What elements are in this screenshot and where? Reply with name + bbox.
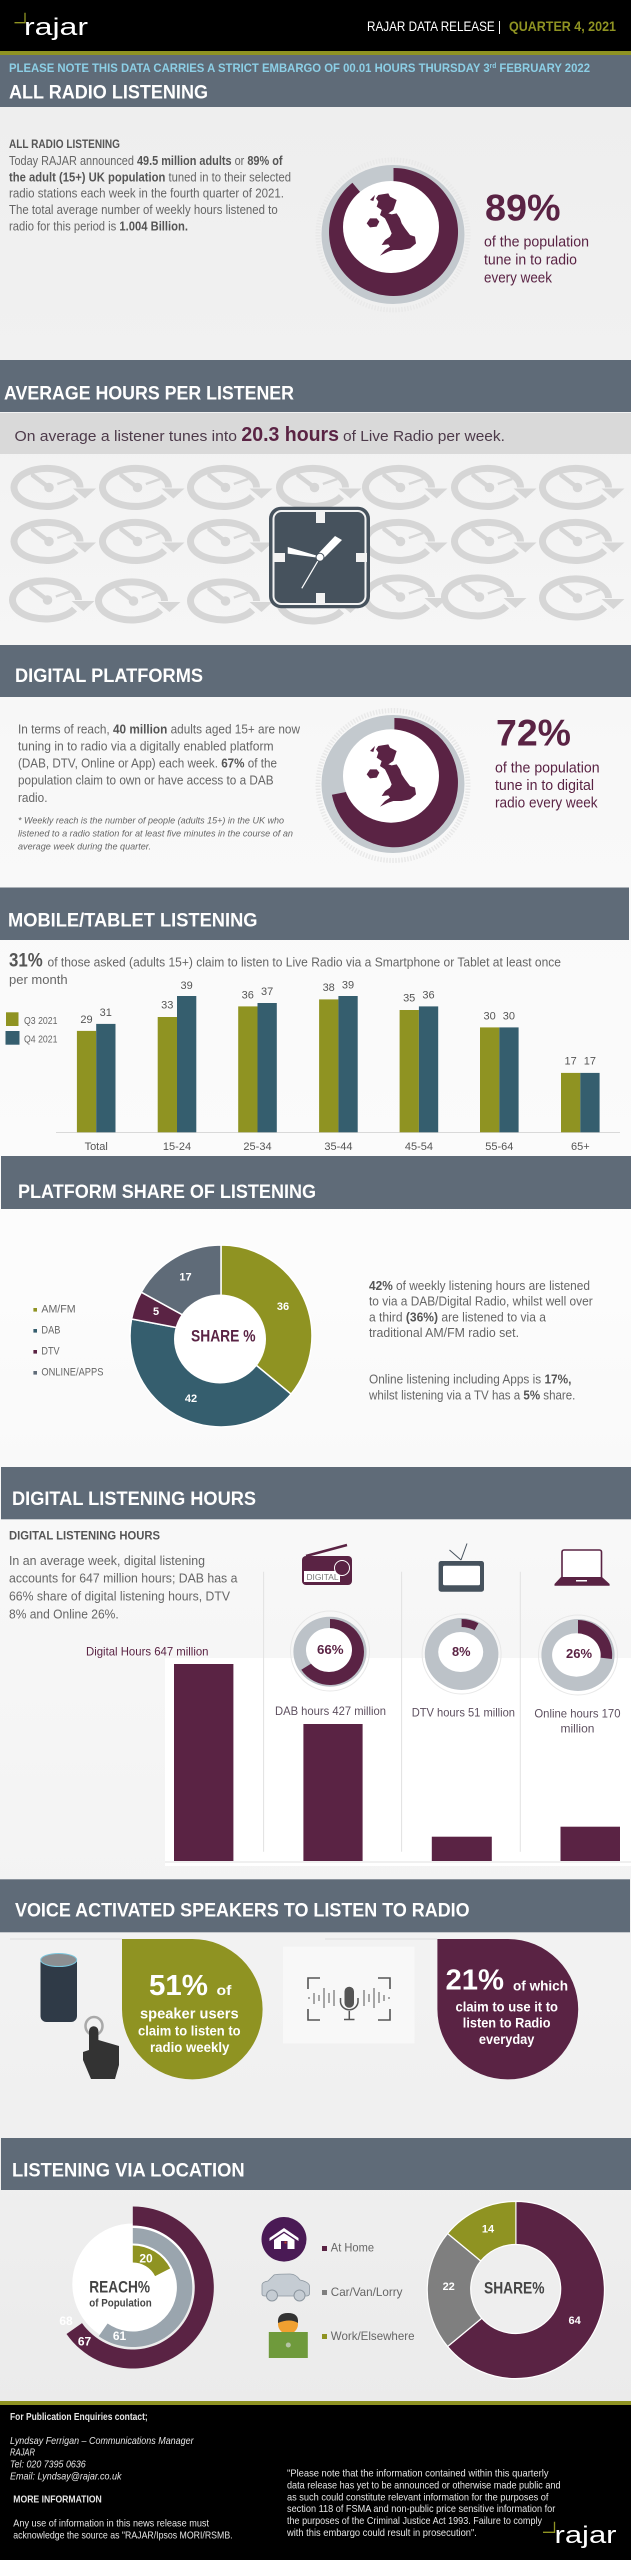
legend: locations [322, 2241, 415, 2343]
bars: 45-54: 35 [403, 993, 415, 1005]
header bar [0, 0, 631, 55]
header title [367, 18, 616, 34]
footer legal notice: with this embargo could result in prosecution". [286, 2527, 477, 2539]
text: mobile statement: 31% [9, 951, 43, 972]
stat: 72 percent: radio every week [495, 795, 598, 812]
bars: 35-44: 38 [323, 982, 335, 994]
text block: digital listening hours: DIGITAL LISTENING HOURS [9, 1528, 160, 1542]
bars: 55-64 [480, 1010, 519, 1153]
bars: 15-24: 15-24 [163, 1141, 191, 1153]
text block: all radio listening: radio for this period is 1.004 Billion. [9, 219, 188, 233]
section 1 heading band with embargo note [0, 55, 631, 107]
bars: 25-34: 36 [242, 989, 254, 1001]
text block: platform share: Online listening including Apps is 17%, [369, 1373, 571, 1387]
icon: car [262, 2274, 310, 2301]
icon: microphone voice box [283, 1947, 414, 2043]
text block: all radio listening [9, 137, 291, 233]
footer contact block: Tel: 020 7395 0636 [10, 2458, 86, 2470]
footer legal notice: as such could constitute relevant information for the purposes of [287, 2491, 549, 2503]
callout: 21 percent: of which [513, 1978, 568, 1994]
text block: digital platforms: population claim to own or have access to a DAB [18, 774, 274, 788]
bar: digital hours 647 million [86, 1645, 233, 1861]
section 1 heading band with embargo note: FEBRUARY 2022 [496, 61, 590, 75]
footer contact block [10, 2411, 233, 2541]
bars: Total: 29 [80, 1014, 93, 1026]
bar: digital hours 647 million: Digital Hours 647 million [86, 1645, 208, 1659]
bars: Total: Total [85, 1141, 108, 1153]
bars: Total [77, 1007, 116, 1153]
donut: online 26 percent [538, 1615, 618, 1695]
icon: digital radio [302, 1545, 352, 1585]
callout: 51 percent: speaker users [140, 2005, 239, 2022]
stat: 89 percent [484, 188, 589, 287]
footer contact block: Any use of information in this news release must [13, 2518, 209, 2530]
column dividers [264, 1572, 520, 1852]
footer legal notice [286, 2468, 561, 2539]
footer rajar logo [543, 2522, 617, 2549]
footer legal notice: data release has yet to be announced or otherwise made public and [287, 2479, 561, 2491]
heading: mobile/tablet listening: MOBILE/TABLET LISTENING [8, 911, 258, 932]
bars: 15-24: 33 [161, 1000, 173, 1012]
rajar logo: rajar [24, 14, 88, 41]
text block: all radio listening: radio stations each week in the fourth quarter of 2021. [9, 187, 284, 201]
header title: QUARTER 4, 2021 [509, 18, 616, 34]
heading: platform share of listening: PLATFORM SHARE OF LISTENING [18, 1182, 316, 1203]
legend: platforms: DTV [41, 1346, 60, 1358]
icon: home [262, 2217, 306, 2262]
legend: quarters: Q3 2021 [24, 1015, 58, 1027]
footer rajar logo: rajar [554, 2522, 617, 2549]
bars: 25-34 [238, 986, 277, 1153]
bar: DAB hours 427 million [275, 1704, 386, 1861]
text block: platform share: to via a DAB/Digital Radio, whilst well over [369, 1295, 593, 1309]
footer contact block: For Publication Enquiries contact; [10, 2411, 148, 2423]
bars: 45-54: 36 [422, 989, 435, 1001]
donut: DAB 66 percent [290, 1611, 370, 1691]
legend: platforms: AM/FM [41, 1304, 76, 1316]
radial chart: reach of population: of Population [89, 2298, 152, 2310]
legend: locations: Work/Elsewhere [331, 2329, 415, 2343]
footer contact block: Email: Lyndsay@rajar.co.uk [10, 2470, 122, 2482]
radial chart: reach of population: 61 [113, 2329, 126, 2343]
text block: all radio listening: Today RAJAR announced 49.5 million adults or 89% of [9, 154, 283, 168]
legend: platforms: ONLINE/APPS [41, 1367, 103, 1379]
bars: 25-34: 37 [261, 986, 273, 998]
donut chart: platform share: 36 [277, 1301, 289, 1313]
text block: digital platforms: In terms of reach, 40 million adults aged 15+ are now [18, 722, 301, 736]
donut: DTV 8 percent [422, 1614, 501, 1694]
icon: large clock [269, 507, 370, 608]
footer legal notice: section 118 of FSMA and non-public price sensitive information for [287, 2503, 556, 2515]
footer contact block: MORE INFORMATION [13, 2494, 102, 2506]
heading: voice activated speakers: VOICE ACTIVATED SPEAKERS TO LISTEN TO RADIO [15, 1901, 470, 1922]
donut: 72 percent with UK map [318, 710, 468, 860]
footnote: average week during the quarter. [18, 841, 151, 852]
bars: 15-24 [158, 980, 196, 1153]
rajar logo [14, 13, 88, 41]
donut chart: share by location: SHARE% [484, 2278, 544, 2297]
stat: 89 percent: of the population [484, 234, 589, 251]
legend: platforms [33, 1304, 103, 1379]
radial chart: reach of population [59, 2206, 214, 2368]
text block: all radio listening: The total average number of weekly hours listened to [9, 203, 278, 217]
bar: online hours 170 million: Online hours 170 [534, 1706, 621, 1720]
heading: voice activated speakers [0, 1879, 630, 1932]
text block: digital platforms [18, 722, 301, 852]
icon: hand pressing [83, 2017, 119, 2079]
callout: 21 percent: everyday [479, 2031, 535, 2047]
section 1 heading band with embargo note: ALL RADIO LISTENING [9, 83, 208, 104]
section 1 heading band with embargo note: rd [490, 63, 496, 70]
donut chart: share by location: 64 [568, 2315, 582, 2327]
bar: online hours 170 million [534, 1706, 621, 1861]
bars: 65+ [561, 1056, 600, 1153]
section 1 heading band with embargo note: PLEASE NOTE THIS DATA CARRIES A STRICT EMBARGO OF 00.01 HOURS THURSDAY 3 [9, 61, 519, 75]
callout: 21 percent: 21% [446, 1964, 504, 1996]
bars: 45-54: 45-54 [405, 1141, 433, 1153]
footer contact block: acknowledge the source as "RAJAR/Ipsos MORI/RSMB. [13, 2529, 233, 2541]
donut: DAB 66 percent: 66% [317, 1642, 344, 1657]
radial chart: reach of population: 67 [78, 2335, 91, 2349]
text block: digital listening hours: accounts for 647 million hours; DAB has a [9, 1572, 237, 1586]
legend: quarters: Q4 2021 [24, 1034, 58, 1046]
stat: 89 percent: 89% [485, 188, 560, 229]
donut chart: platform share [130, 1245, 312, 1427]
icon: UK map [367, 744, 416, 807]
footer legal notice: the purposes of the Criminal Justice Act 1993. Failure to comply [287, 2515, 543, 2527]
band: average hours statement: 20.3 hours [241, 424, 339, 446]
band: average hours statement: On average a listener tunes into [14, 428, 237, 445]
donut chart: platform share: 5 [153, 1306, 159, 1318]
chart backdrop [165, 1658, 631, 1866]
donut chart: platform share: 42 [185, 1393, 197, 1405]
stat: 72 percent: tune in to digital [495, 777, 594, 794]
bars: 35-44: 35-44 [324, 1141, 352, 1153]
bars: 35-44: 39 [342, 979, 354, 991]
band: average hours statement [0, 413, 631, 454]
bar: online hours 170 million: million [560, 1721, 594, 1735]
text block: platform share [368, 1279, 593, 1402]
text block: platform share: a third (36%) are listened to via a [369, 1310, 546, 1324]
bars: 15-24: 39 [180, 980, 193, 992]
icon: smart speaker [40, 1954, 77, 2022]
heading: digital listening hours [1, 1467, 631, 1519]
text block: digital platforms: (DAB, DTV, Online or App) each week. 67% of the [18, 756, 277, 770]
legend: locations: At Home [331, 2241, 374, 2255]
text block: platform share: 42% of weekly listening hours are listened [369, 1279, 590, 1293]
band: average hours statement: of Live Radio per week. [343, 428, 505, 445]
bars: 45-54 [400, 989, 438, 1153]
text block: digital listening hours: In an average week, digital listening [9, 1554, 205, 1568]
text block: platform share: whilst listening via a TV has a 5% share. [368, 1388, 575, 1402]
bars: 55-64: 55-64 [485, 1141, 513, 1153]
icon: person at laptop [269, 2313, 308, 2358]
donut chart: share by location: 22 [443, 2281, 455, 2293]
bar chart: mobile/tablet listening by age [56, 979, 620, 1153]
stat: 89 percent: tune in to radio [484, 252, 577, 269]
bars: 35-44 [319, 979, 358, 1153]
bars: 65+: 17 [564, 1056, 577, 1068]
donut chart: share by location [427, 2201, 604, 2379]
callout: 51 percent: of [216, 1982, 232, 1998]
bar: DTV hours 51 million: DTV hours 51 million [412, 1706, 515, 1720]
legend: locations: Car/Van/Lorry [331, 2285, 402, 2299]
radial chart: reach of population: REACH% [89, 2277, 150, 2296]
header title: RAJAR DATA RELEASE | [367, 18, 501, 34]
heading: platform share of listening [1, 1156, 631, 1209]
text block: digital platforms: tuning in to radio via a digitally enabled platform [18, 739, 274, 753]
callout: 21 percent: listen to Radio [463, 2015, 550, 2031]
stat: 72 percent [495, 713, 600, 812]
heading: mobile/tablet listening [0, 888, 629, 940]
bars: 55-64: 30 [483, 1010, 496, 1022]
footer contact block: RAJAR [10, 2447, 35, 2459]
bars: Total: 31 [100, 1007, 112, 1019]
donut: online 26 percent: 26% [566, 1646, 592, 1661]
text: mobile statement: per month [9, 973, 68, 987]
bars: 25-34: 25-34 [243, 1141, 272, 1153]
callout: 21 percent [325, 1939, 578, 2079]
icon: digital radio: DIGITAL [306, 1572, 339, 1582]
donut chart: share by location: 14 [482, 2224, 495, 2236]
footer legal notice: "Please note that the information contained within this quarterly [287, 2468, 549, 2480]
bars: 65+: 65+ [571, 1141, 590, 1153]
text block: digital platforms: radio. [18, 791, 48, 805]
bars: 55-64: 30 [503, 1010, 515, 1022]
text: mobile statement: of those asked (adults 15+) claim to listen to Live Radio via a Smartphone or Tablet at least once [48, 956, 561, 970]
donut: DTV 8 percent: 8% [452, 1644, 471, 1659]
callout: 51 percent: radio weekly [150, 2039, 230, 2055]
radial chart: reach of population: 20 [139, 2252, 153, 2266]
text block: digital listening hours: 8% and Online 26%. [9, 1608, 119, 1622]
heading: listening via location [1, 2138, 631, 2190]
icon: laptop [554, 1550, 610, 1586]
footer contact block: Lyndsay Ferrigan – Communications Manager [10, 2435, 194, 2447]
text block: digital listening hours [9, 1528, 237, 1622]
footer [0, 2401, 631, 2560]
stat: 89 percent: every week [484, 270, 552, 287]
legend: quarters [6, 1012, 58, 1046]
heading: listening via location: LISTENING VIA LOCATION [12, 2161, 245, 2182]
stat: 72 percent: of the population [495, 759, 600, 776]
icon: UK map [367, 193, 416, 256]
heading: digital platforms: DIGITAL PLATFORMS [15, 666, 203, 687]
callout: 51 percent: 51% [149, 1970, 208, 2002]
donut chart: platform share: 17 [179, 1272, 192, 1284]
heading: average hours per listener: AVERAGE HOURS PER LISTENER [4, 383, 294, 404]
bar chart: digital hours [86, 1645, 631, 1862]
callout: 51 percent: claim to listen to [138, 2023, 241, 2039]
text: mobile statement [9, 951, 561, 987]
footnote [18, 815, 293, 852]
text block: platform share: traditional AM/FM radio set. [369, 1326, 519, 1340]
callout: 21 percent: claim to use it to [456, 1999, 558, 2015]
legend: platforms: DAB [41, 1325, 60, 1337]
text block: all radio listening: ALL RADIO LISTENING [9, 137, 120, 151]
footnote: * Weekly reach is the number of people (adults 15+) in the UK who [18, 815, 284, 826]
bars: 65+: 17 [584, 1056, 596, 1068]
icons: grid of repeating clocks [13, 468, 625, 621]
heading: average hours per listener [0, 360, 631, 412]
stat: 72 percent: 72% [496, 713, 571, 754]
icon: television [439, 1544, 484, 1592]
heading: digital listening hours: DIGITAL LISTENING HOURS [12, 1489, 256, 1510]
donut chart: platform share: SHARE % [191, 1327, 256, 1346]
footnote: listened to a radio station for at least five minutes in the course of an [18, 829, 293, 840]
text block: digital listening hours: 66% share of digital listening hours, DTV [9, 1590, 231, 1604]
donut: 89 percent with UK map [318, 160, 468, 310]
radial chart: reach of population: 68 [59, 2314, 73, 2328]
callout: 51 percent [10, 1939, 263, 2079]
heading: digital platforms [0, 645, 631, 697]
text block: all radio listening: the adult (15+) UK population tuned in to their selected [9, 170, 291, 184]
bar: DAB hours 427 million: DAB hours 427 million [275, 1704, 386, 1718]
bar: DTV hours 51 million [412, 1706, 515, 1861]
